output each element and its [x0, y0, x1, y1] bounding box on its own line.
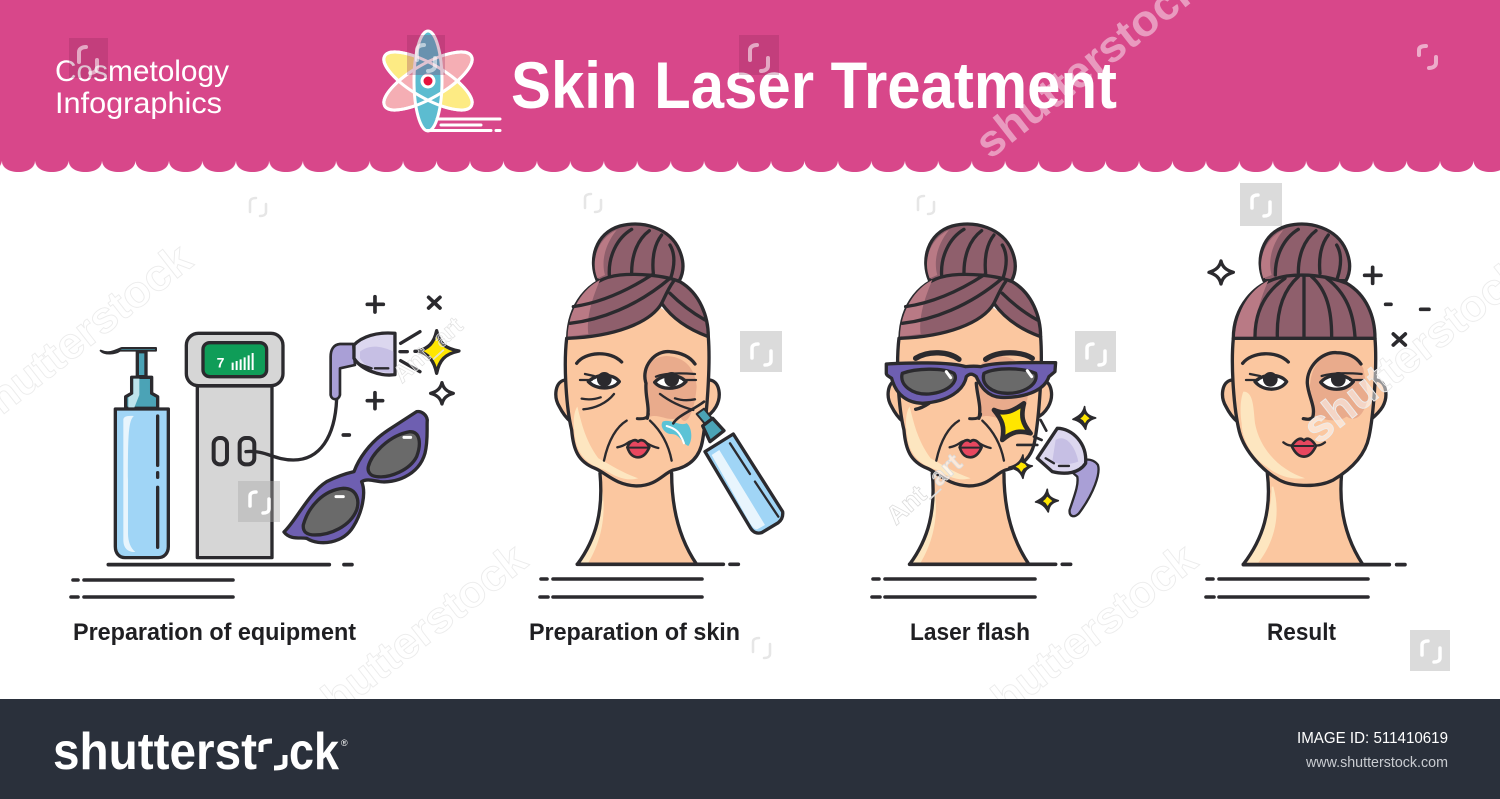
icon: laser handpiece	[331, 333, 395, 399]
eyes, brows and nose	[1243, 353, 1363, 419]
watermark: diagonal shutterstock text and stamps: shutterstock	[293, 534, 536, 739]
face	[1232, 338, 1376, 485]
header subtitle: Cosmetology Infographics: Cosmetology	[55, 55, 229, 88]
ears	[1223, 380, 1237, 422]
watermark: diagonal shutterstock text and stamps: Ant_art	[388, 312, 468, 388]
header banner	[0, 0, 1500, 173]
watermark: diagonal shutterstock text and stamps: shutterstock	[963, 534, 1206, 739]
cable	[246, 399, 337, 460]
panel: preparation of equipment	[101, 297, 459, 565]
neck	[1243, 472, 1363, 564]
watermark: diagonal shutterstock text and stamps	[0, 183, 1500, 739]
footer url: www.shutterstock.com	[1305, 755, 1448, 771]
flash star on cheek	[994, 403, 1031, 440]
text lines	[540, 579, 702, 597]
text lines	[872, 579, 1035, 597]
label: preparation of equipment: Preparation of equipment	[73, 619, 356, 646]
icon: atom logo	[376, 31, 500, 131]
icon: small sparkle	[431, 383, 453, 404]
icon: laser machine: 7	[217, 354, 225, 370]
panel: result	[1206, 224, 1429, 597]
ground line	[1243, 559, 1405, 570]
footer logo: ®	[341, 738, 348, 748]
illustration: aged face with glasses	[886, 224, 1099, 564]
header subtitle: Cosmetology Infographics: Infographics	[55, 87, 222, 120]
illustration: young face	[1209, 224, 1429, 565]
label: result: Result	[1267, 619, 1336, 646]
lips	[1283, 439, 1325, 457]
sparkle marks	[343, 297, 440, 435]
laser rays	[1017, 420, 1046, 445]
icon: pump bottle	[101, 348, 168, 558]
icon: laser machine	[186, 333, 283, 558]
icon: flash star	[418, 331, 459, 373]
fringe	[1233, 275, 1375, 338]
icon: sunglasses	[284, 412, 427, 543]
header watermark	[69, 0, 1436, 168]
label: preparation of skin: Preparation of skin	[529, 619, 740, 646]
footer logo: ck	[289, 723, 339, 781]
label: laser flash: Laser flash	[910, 619, 1030, 646]
bun	[1260, 224, 1350, 281]
nose and wrinkle	[916, 383, 980, 418]
small flash star on jaw	[1009, 455, 1032, 478]
cream bottle	[673, 402, 783, 533]
sparkle marks	[1209, 261, 1429, 345]
footer logo: shutterst	[53, 723, 257, 781]
panel: preparation of skin	[540, 224, 783, 597]
handpiece	[1037, 428, 1099, 516]
sparkle stars	[1036, 407, 1096, 512]
footer image id: IMAGE ID: 511410619	[1297, 730, 1448, 747]
footer bar	[0, 699, 1500, 799]
watermark: diagonal shutterstock text and stamps: Ant_art	[880, 447, 968, 530]
text lines	[1206, 579, 1368, 597]
illustration: aged face	[556, 224, 783, 564]
ground line	[108, 559, 352, 570]
panel: laser flash	[872, 224, 1099, 597]
title: Skin Laser Treatment	[511, 48, 1117, 122]
eyes and brows	[577, 352, 696, 418]
equipment text lines	[71, 580, 233, 597]
light rays	[400, 332, 422, 372]
sunglasses worn	[886, 353, 1056, 403]
header subtitle: Cosmetology Infographics	[55, 55, 229, 120]
cream on cheek	[662, 421, 691, 446]
